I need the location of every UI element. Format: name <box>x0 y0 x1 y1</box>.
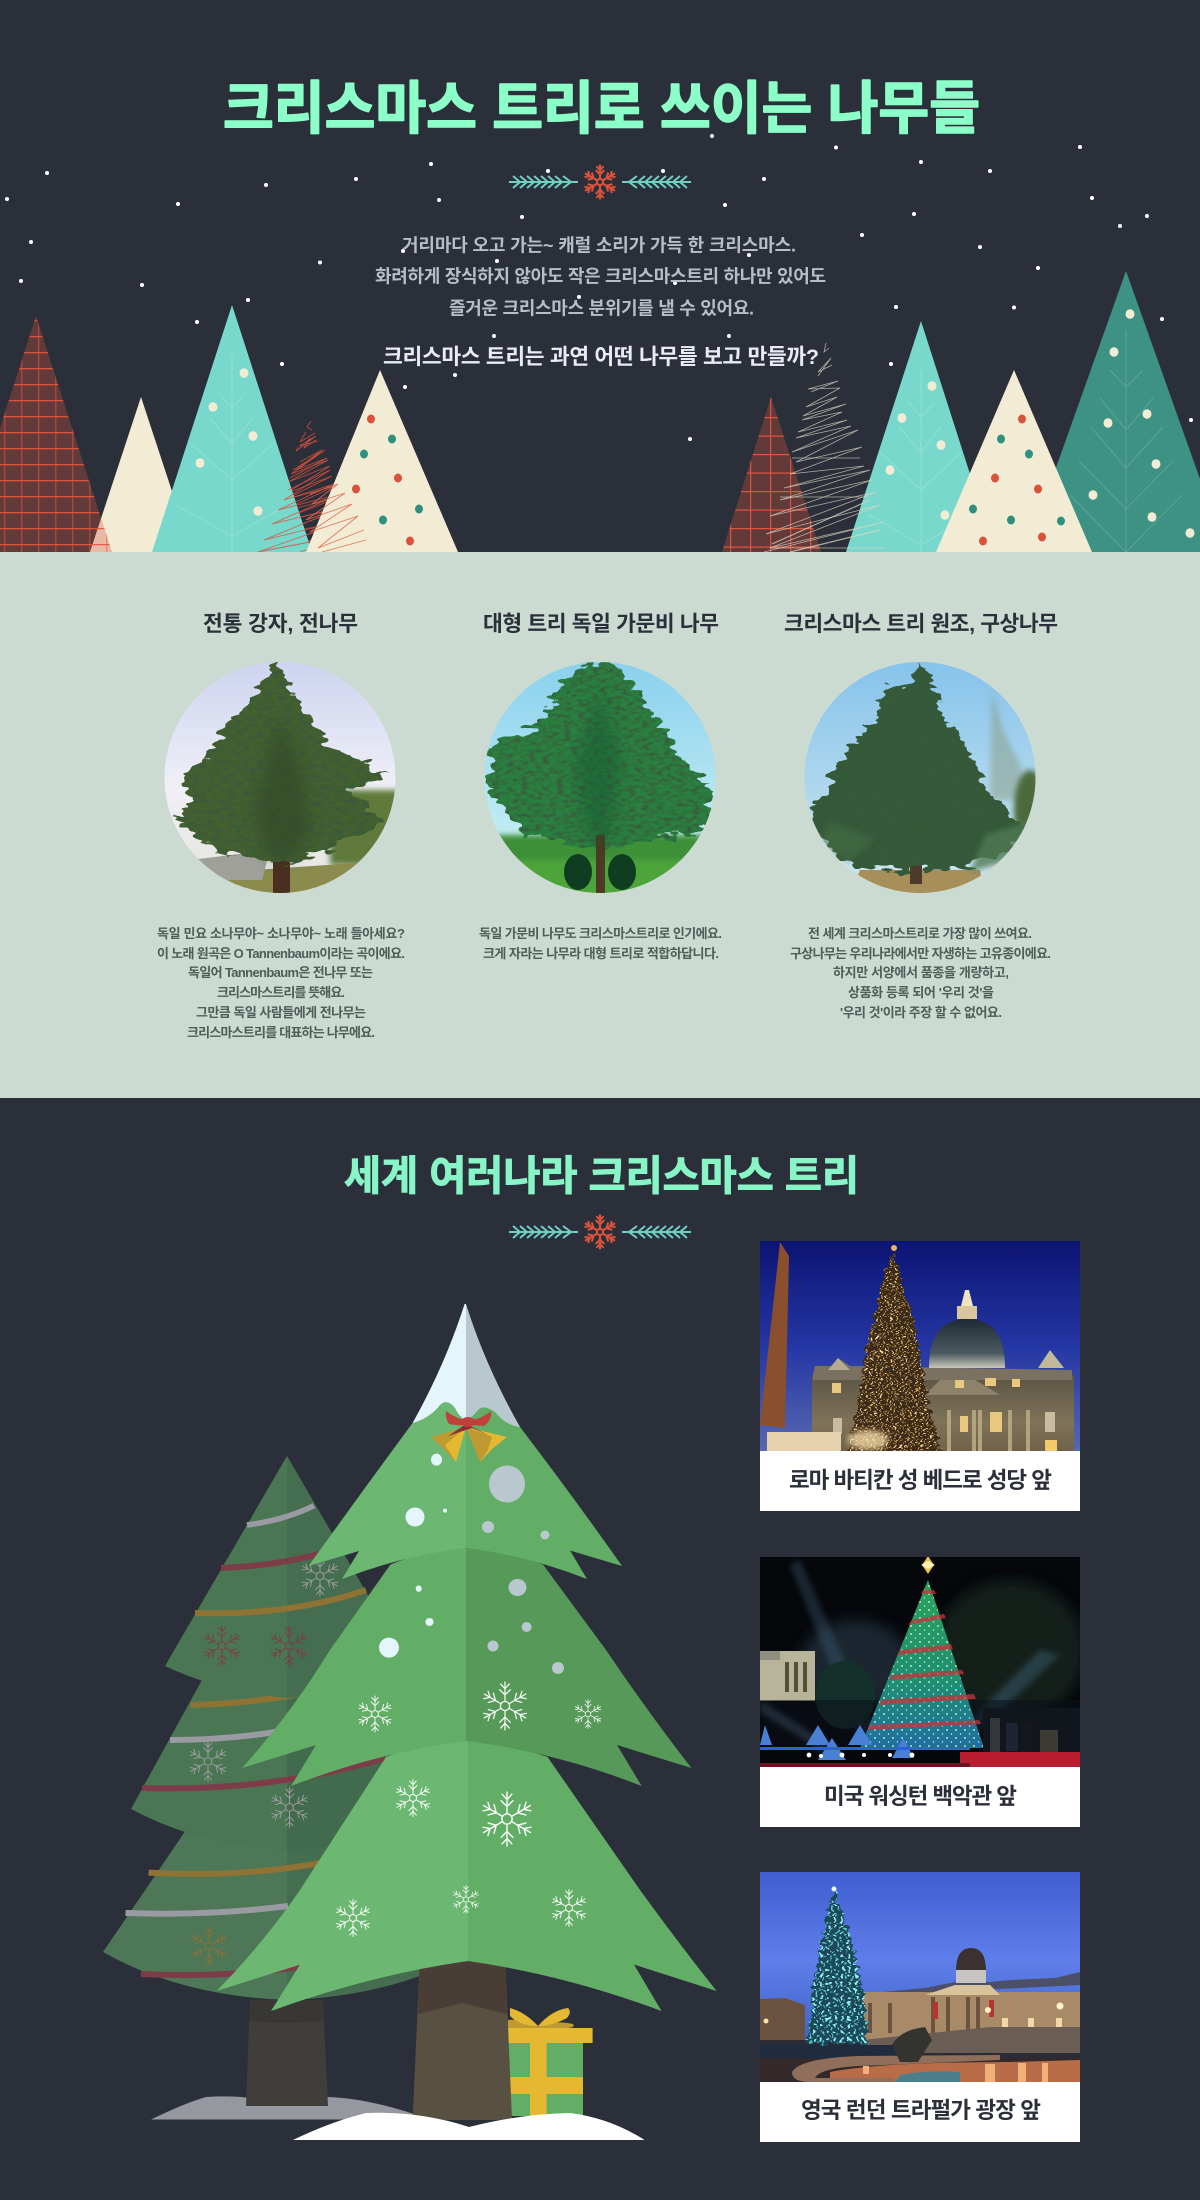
back snow mound <box>151 2096 430 2120</box>
photo card: London: 영국 런던 트라펄가 광장 앞 <box>801 2098 1041 2123</box>
illustration: snow mound <box>293 2113 645 2140</box>
description: 독일어 Tannenbaum은 전나무 또는 <box>188 965 373 980</box>
photo: White House tree <box>760 1556 1085 1767</box>
ornaments: snow balls <box>379 1454 564 1674</box>
description: 상품화 등록 되어 '우리 것'을 <box>848 985 994 1000</box>
tree: cream with dots <box>306 370 458 552</box>
photo: korean fir <box>804 662 1046 895</box>
description: 구상나무는 우리나라에서만 자생하는 고유종이에요. <box>790 946 1051 961</box>
tree: red scribble overlay <box>258 438 362 552</box>
illustration: front trunk <box>413 1955 512 2120</box>
photo card: Rome: 로마 바티칸 성 베드로 성당 앞 <box>789 1468 1052 1493</box>
illustration: front tree <box>217 1304 717 2011</box>
photo: spruce tree <box>484 660 716 895</box>
scribble strokes over cream tree <box>306 484 366 552</box>
description: 독일 민요 소나무야~ 소나무야~ 노래 들아세요? <box>157 926 405 941</box>
back tier 2 <box>131 1620 443 1850</box>
photo card: Washington <box>760 1556 1085 1827</box>
photo card: London <box>760 1872 1080 2142</box>
bells and bow <box>431 1411 507 1462</box>
tier 2 <box>242 1548 691 1786</box>
section heading: 세계 여러나라 크리스마스 트리 <box>344 1153 859 1199</box>
snow dots <box>5 134 1193 441</box>
ornament: branches and snowflake <box>509 166 691 198</box>
panel: tree species <box>0 552 1200 1098</box>
tier 3 <box>217 1741 717 2011</box>
intro text: 화려하게 장식하지 않아도 작은 크리스마스트리 하나만 있어도 <box>375 266 826 286</box>
description: 크리스마스트리를 대표하는 나무에요. <box>187 1025 375 1040</box>
tree: teal with dots <box>846 321 995 552</box>
label <box>760 1767 1080 1827</box>
intro text <box>375 236 826 318</box>
question text: 크리스마스 트리는 과연 어떤 나무를 보고 만들까? <box>383 345 819 369</box>
panel background <box>0 552 1200 1098</box>
photo: Trafalgar Square <box>760 1872 1080 2082</box>
heading: 크리스마스 트리 원조, 구상나무 <box>784 612 1058 636</box>
title: 크리스마스 트리로 쓰이는 나무들 <box>223 77 980 141</box>
heading: 대형 트리 독일 가문비 나무 <box>483 612 719 636</box>
description <box>790 926 1051 1020</box>
photo card: Rome <box>760 1241 1080 1511</box>
label <box>760 1451 1080 1511</box>
description: 그만큼 독일 사람들에게 전나무는 <box>196 1005 366 1020</box>
description: 크리스마스트리를 뜻해요. <box>217 985 345 1000</box>
tree: teal with dots <box>152 305 312 555</box>
tree: red plaid right <box>722 397 821 552</box>
tree: dark teal <box>1026 271 1200 552</box>
tree: grey scribble <box>764 343 885 552</box>
intro text: 거리마다 오고 가는~ 캐럴 소리가 가득 한 크리스마스. <box>402 236 796 256</box>
snow cap <box>413 1304 520 1427</box>
tree: red plaid left <box>0 316 112 552</box>
intro text: 즐거운 크리스마스 분위기를 낼 수 있어요. <box>449 298 754 318</box>
column: 구상나무 <box>784 612 1058 1020</box>
photo: fir tree <box>164 662 400 895</box>
back tier 3 <box>103 1780 471 2000</box>
back tier 1 <box>165 1456 409 1698</box>
left tree group <box>0 305 458 555</box>
back trunk <box>246 2000 328 2106</box>
description <box>157 926 405 1040</box>
description: 이 노래 원곡은 O Tannenbaum이라는 곡이에요. <box>157 946 405 961</box>
tree: cream plain <box>90 397 192 552</box>
panel: world trees <box>103 1153 1085 2142</box>
photo: St Peter's at dusk <box>760 1241 1080 1460</box>
tree: red scribble <box>258 421 360 552</box>
description <box>479 926 722 961</box>
tree: cream with dots <box>936 370 1092 552</box>
column: 가문비 <box>479 612 722 961</box>
description: 하지만 서양에서 품종을 개량하고, <box>833 965 1009 980</box>
column: 전나무 <box>157 612 405 1040</box>
panel: hero <box>0 77 1200 555</box>
heading: 전통 강자, 전나무 <box>203 612 358 636</box>
ornament: branches and snowflake <box>509 1216 691 1248</box>
description: 전 세계 크리스마스트리로 가장 많이 쓰여요. <box>808 926 1032 941</box>
tier 1 <box>308 1380 622 1579</box>
description: '우리 것'이라 주장 할 수 없어요. <box>840 1005 1002 1020</box>
label <box>760 2082 1080 2142</box>
description: 크게 자라는 나무라 대형 트리로 적합하답니다. <box>483 946 719 961</box>
photo card: Washington: 미국 워싱턴 백악관 앞 <box>824 1784 1017 1809</box>
illustration: back tree <box>103 1456 471 2120</box>
right tree group <box>722 271 1200 552</box>
description: 독일 가문비 나무도 크리스마스트리로 인기에요. <box>479 926 722 941</box>
illustration: gift box <box>508 2008 593 2116</box>
